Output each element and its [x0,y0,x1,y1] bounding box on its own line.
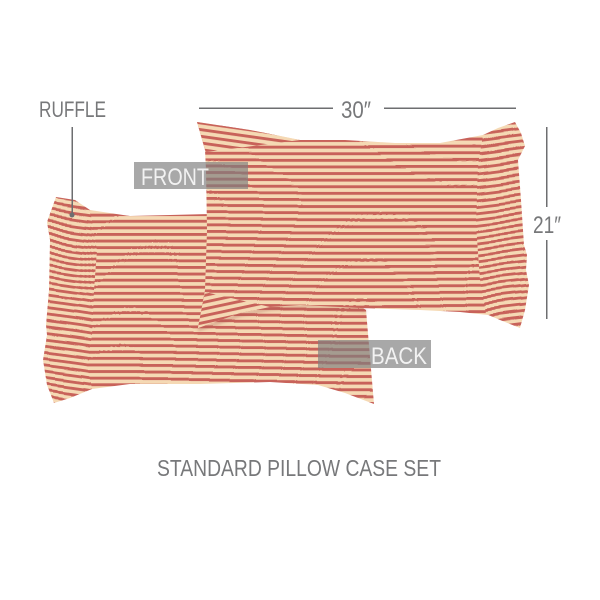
front pillow [197,122,529,328]
infographic canvas [40,101,561,476]
front pillow lower left corner [198,292,270,328]
front pillow shadow [198,307,366,330]
height dimension: 21 inches: 21″ [533,212,561,239]
label: back: BACK [371,343,427,370]
label: back [318,340,431,370]
back pillow ruffle [43,197,97,403]
front pillow body [197,122,488,328]
back pillow body [87,210,374,404]
front pillow upper left corner [197,122,300,152]
label: front [134,162,248,191]
caption: STANDARD PILLOW CASE SET [157,455,441,481]
label: front: FRONT [141,164,209,191]
front pillow ruffle [476,122,529,328]
width dimension: 30 inches: 30″ [341,97,371,124]
ruffle callout [39,97,106,218]
ruffle callout: RUFFLE [39,97,106,122]
back pillow [43,197,374,404]
